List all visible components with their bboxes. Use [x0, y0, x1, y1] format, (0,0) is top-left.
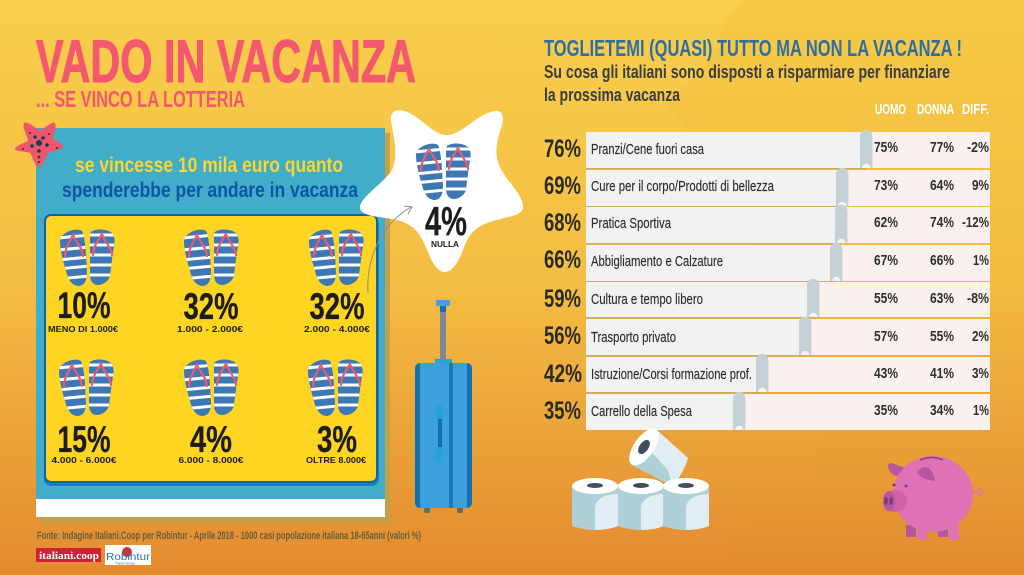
- row: cure: Cure per il corpo/Prodotti di bellezza: [591, 179, 775, 195]
- logo: italiani.coop: italiani.coop: [39, 550, 99, 562]
- row: abbigliamento: [544, 243, 990, 282]
- panel heading line 1: se vincesse 10 mila euro quanto: [75, 154, 343, 177]
- icon: toilet paper rolls: [572, 424, 709, 530]
- row: carrello: [544, 392, 990, 430]
- row: cultura: 63%: [930, 290, 954, 307]
- answer: oltre 8.000: [306, 357, 366, 465]
- row: istruzione: 42%: [544, 360, 582, 388]
- row: abbigliamento: 66%: [930, 252, 954, 269]
- answer: 2.000-4.000: 2.000 - 4.000€: [304, 324, 370, 334]
- answer: 6.000-8.000: [178, 357, 244, 465]
- row: trasporto: [544, 317, 990, 356]
- row: pratica sportiva: -12%: [962, 214, 989, 231]
- section subheading: la prossima vacanza: [544, 85, 681, 105]
- logo: Robintur: Robintur: [106, 552, 151, 563]
- callout label: NULLA: [431, 239, 459, 249]
- row: cultura: Cultura e tempo libero: [591, 292, 703, 308]
- row: trasporto: Trasporto privato: [591, 330, 676, 346]
- row: pratica sportiva: [544, 205, 990, 244]
- logo: Robintur: [105, 545, 151, 566]
- row: pranzi: 77%: [930, 139, 954, 156]
- panel heading line 2: spenderebbe per andare in vacanza: [62, 179, 358, 202]
- callout percent: 4%: [425, 198, 467, 244]
- answer: 4.000-6.000: 4.000 - 6.000€: [52, 455, 117, 465]
- logo: Robintur: Travel Group: [115, 562, 135, 566]
- row: cultura: -8%: [967, 290, 989, 307]
- panel: spending on vacation: [36, 128, 390, 523]
- answer: meno di 1.000: [48, 227, 118, 334]
- row: abbigliamento: 66%: [544, 246, 581, 274]
- table of savings: [544, 130, 990, 430]
- answer: 1.000-2.000: [177, 227, 243, 334]
- row: istruzione: Istruzione/Corsi formazione prof.: [591, 367, 752, 383]
- answer: 1.000-2.000: 32%: [184, 286, 238, 327]
- source note: Fonte: Indagine Italiani.Coop per Robintur - Aprile 2018 - 1000 casi popolazione italiana 18-65anni (valori %): [37, 530, 421, 542]
- table column headers: UOMO: [875, 101, 906, 118]
- answer: 2.000-4.000: 32%: [310, 286, 364, 327]
- answer: 6.000-8.000: 4%: [190, 419, 232, 460]
- row: cultura: [544, 279, 990, 318]
- row: cultura: 55%: [874, 290, 898, 307]
- answer: 6.000-8.000: 6.000 - 8.000€: [178, 455, 244, 465]
- icon: blue suitcase: [415, 300, 472, 513]
- yellow answers box: [44, 215, 379, 486]
- row: abbigliamento: Abbigliamento e Calzature: [591, 254, 723, 270]
- row: istruzione: 3%: [972, 365, 989, 382]
- row: pranzi: 76%: [544, 135, 581, 163]
- row: pranzi: [544, 130, 990, 170]
- row: cure: 9%: [972, 177, 989, 194]
- row: pratica sportiva: Pratica Sportiva: [591, 216, 672, 232]
- row: cure: 64%: [930, 177, 954, 194]
- row: cure: [544, 168, 990, 208]
- row: pranzi: 75%: [874, 139, 898, 156]
- row: trasporto: 2%: [972, 328, 989, 345]
- row: trasporto: 57%: [874, 328, 898, 345]
- row: carrello: 35%: [874, 402, 898, 419]
- answer: oltre 8.000: 3%: [317, 419, 357, 460]
- row: pratica sportiva: 62%: [874, 214, 898, 231]
- row: abbigliamento: 67%: [874, 252, 898, 269]
- subtitle: ... SE VINCO LA LOTTERIA: [36, 86, 245, 112]
- row: carrello: Carrello della Spesa: [591, 404, 693, 420]
- row: pratica sportiva: 74%: [930, 214, 954, 231]
- row: pranzi: -2%: [967, 139, 989, 156]
- row: abbigliamento: 1%: [973, 252, 989, 269]
- answer: oltre 8.000: OLTRE 8.000€: [306, 455, 366, 465]
- row: trasporto: 55%: [930, 328, 954, 345]
- answer: 4.000-6.000: 15%: [58, 419, 110, 460]
- icon: red starfish: [15, 123, 63, 167]
- answer: 2.000-4.000: [304, 227, 370, 334]
- row: carrello: 35%: [544, 397, 581, 425]
- table column headers: [875, 101, 989, 118]
- row: cure: 73%: [874, 177, 898, 194]
- table column headers: DIFF.: [962, 101, 989, 118]
- row: pranzi: Pranzi/Cene fuori casa: [591, 142, 705, 158]
- table column headers: DONNA: [917, 101, 954, 118]
- answer: meno di 1.000: 10%: [58, 285, 110, 326]
- answer: meno di 1.000: MENO DI 1.000€: [48, 324, 118, 334]
- row: istruzione: 43%: [874, 365, 898, 382]
- row: trasporto: 56%: [544, 322, 581, 350]
- callout: white star, nulla: [360, 110, 523, 272]
- section subheading: [544, 62, 950, 105]
- row: istruzione: 41%: [930, 365, 954, 382]
- row: istruzione: [544, 354, 990, 394]
- row: carrello: 1%: [973, 402, 989, 419]
- row: cultura: 59%: [544, 285, 581, 313]
- arrow to star: [368, 206, 412, 293]
- answer: 1.000-2.000: 1.000 - 2.000€: [177, 324, 243, 334]
- row: cure: 69%: [544, 172, 581, 200]
- answer: 4.000-6.000: [52, 357, 117, 465]
- title: VADO IN VACANZA: [36, 28, 416, 95]
- icon: piggy bank: [883, 456, 982, 540]
- row: pratica sportiva: 68%: [544, 209, 581, 237]
- row: carrello: 34%: [930, 402, 954, 419]
